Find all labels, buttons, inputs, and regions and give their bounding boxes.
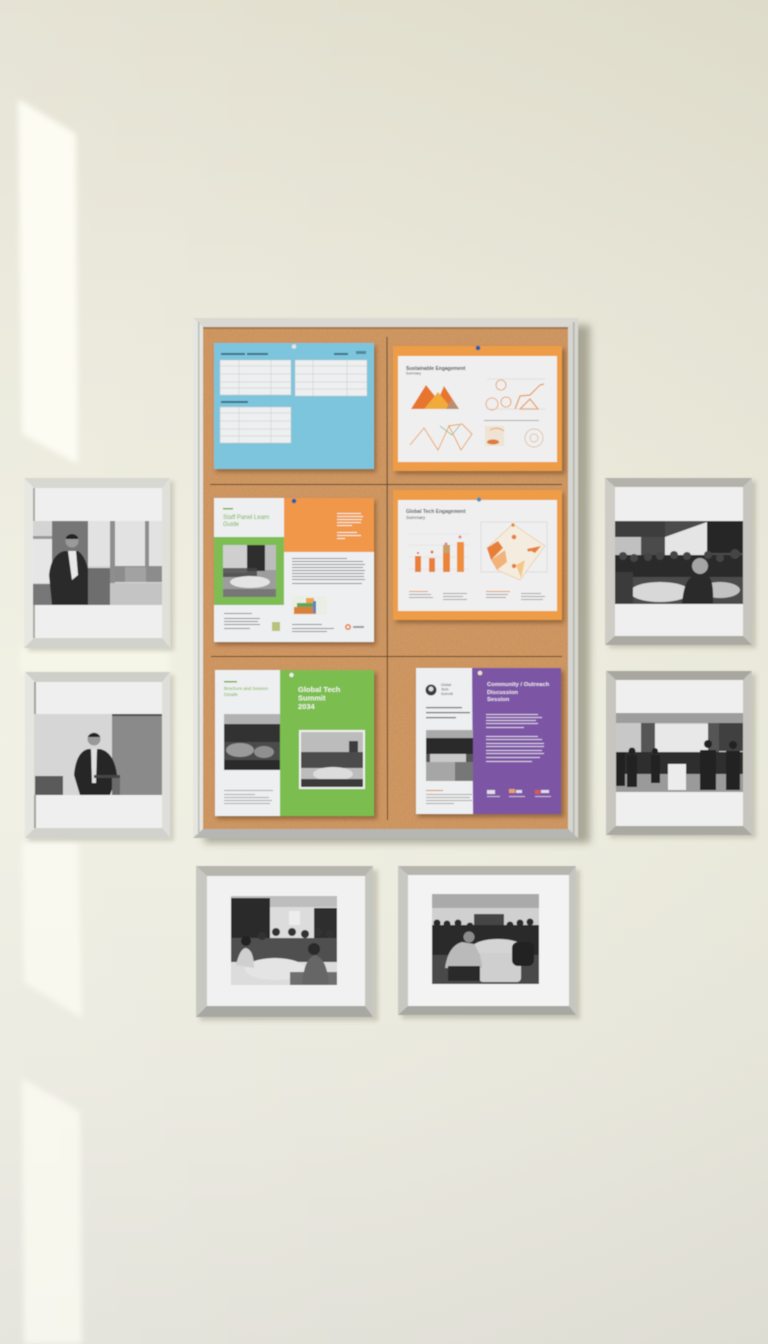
crowd heads — [619, 549, 740, 562]
sponsor logos — [487, 789, 551, 797]
small diagrams — [485, 426, 543, 447]
white copy on orange — [337, 513, 363, 539]
framed photo: speaker by window — [24, 478, 174, 651]
left copy — [426, 707, 470, 718]
pin — [292, 344, 296, 349]
brochure heading: Global Tech — [298, 685, 341, 694]
pin — [292, 499, 296, 503]
framed photo: banquet hall crowd — [398, 866, 580, 1019]
qr code — [272, 622, 280, 631]
body copy — [224, 558, 365, 632]
schedule tables — [220, 360, 367, 443]
framed photo: banquet with dark banners — [196, 866, 378, 1021]
pin — [476, 346, 480, 350]
standing figures — [616, 740, 740, 790]
cork board — [193, 318, 590, 843]
pin — [478, 671, 482, 675]
poster: Global Tech Summit green brochure — [215, 670, 377, 819]
logo badge: Tech — [441, 688, 448, 692]
sunlight patches — [18, 99, 82, 1344]
left photo — [224, 714, 280, 770]
cork surface — [203, 327, 568, 829]
round table — [472, 939, 524, 982]
mountain chart — [411, 385, 459, 409]
guest from behind — [445, 932, 482, 981]
mini map — [292, 596, 327, 615]
crowd heads — [434, 918, 534, 930]
pin — [477, 497, 481, 502]
hexagon diagram — [481, 522, 547, 580]
board grid lines — [210, 337, 562, 820]
poster: orange charts sheet: Sustainable Engagement — [406, 366, 466, 372]
poster: Global Tech Summit green brochure: 2034 — [298, 702, 316, 711]
poster: green and orange brochure: Staff Panel Learn — [223, 515, 269, 521]
podium speaker — [74, 732, 120, 795]
sunlight under left frames — [20, 648, 170, 672]
seated guests — [236, 936, 329, 985]
poster: community session purple brochure: Discussion — [487, 690, 518, 696]
poster: community session purple brochure — [416, 668, 564, 817]
purple heading: Community / Outreach — [487, 682, 550, 688]
purple copy — [486, 714, 544, 762]
poster: Global Tech Summit green brochure: Details — [224, 692, 239, 697]
poster: community session purple brochure: Session — [487, 697, 510, 703]
poster: orange charts sheet: Summary — [406, 372, 421, 376]
board frame — [193, 318, 578, 838]
crowd heads — [258, 928, 334, 940]
left small print — [426, 790, 472, 804]
framed photo: standing crowd — [606, 671, 756, 838]
network chart — [486, 379, 545, 410]
line chart — [410, 424, 472, 450]
bar chart — [408, 534, 469, 572]
poster: Global Tech Summit green brochure: Summit — [298, 694, 326, 702]
event photo — [223, 545, 276, 597]
speaker figure — [49, 534, 88, 605]
small print — [224, 790, 273, 804]
logo badge: Global — [441, 683, 451, 687]
pin — [289, 673, 294, 677]
poster: orange bar chart sheet: Global Tech Engagement — [406, 509, 466, 515]
poster: orange bar chart sheet: Summary — [406, 515, 426, 520]
poster: green and orange brochure: Guide — [223, 522, 240, 528]
poster: green and orange brochure — [214, 498, 376, 645]
poster: orange charts sheet — [393, 346, 565, 474]
logo — [346, 625, 364, 629]
framed photo: roundtable with banner — [605, 478, 756, 648]
logo badge: Summit — [441, 692, 453, 696]
logo badge — [426, 683, 453, 696]
poster: orange bar chart sheet — [393, 490, 564, 623]
right photo — [299, 730, 365, 789]
poster: Global Tech Summit green brochure: Brochure and Session — [224, 686, 269, 691]
left photo — [426, 730, 473, 781]
poster: blue schedule sheet — [214, 343, 376, 472]
framed photo: speaker at podium — [25, 672, 174, 841]
seated guest — [682, 558, 713, 604]
board shadow — [204, 325, 590, 843]
chart captions — [409, 591, 545, 600]
